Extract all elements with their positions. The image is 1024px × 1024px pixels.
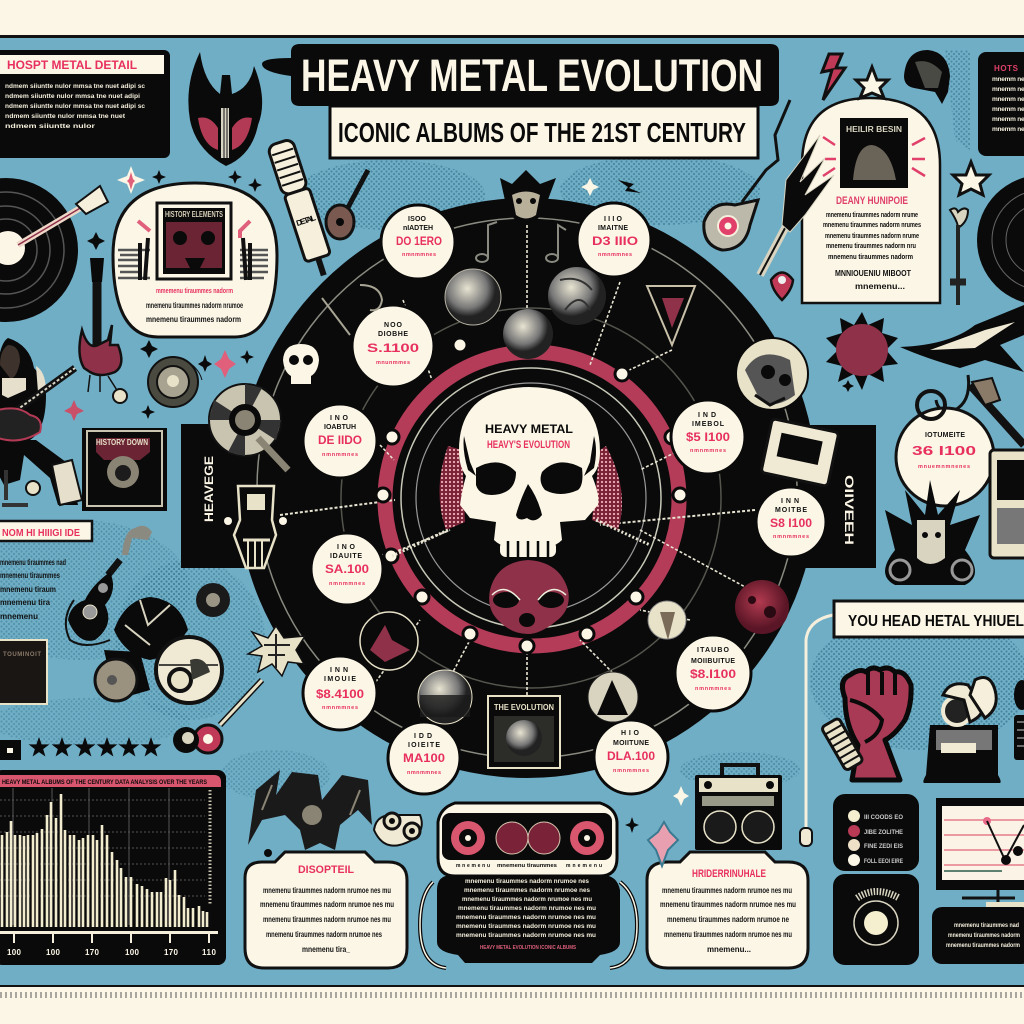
icon: spiked helmet top <box>500 170 556 225</box>
bubble 4: INO <box>330 415 349 422</box>
icon: vinyl record left <box>0 178 78 322</box>
icon: top right skull <box>904 50 950 104</box>
bubble 9: $8.I100 <box>690 667 736 681</box>
bubble 2 <box>577 203 651 277</box>
bubble 6: INN <box>781 498 799 505</box>
panel: arched album card right <box>802 98 940 303</box>
bubble 6 <box>756 487 826 557</box>
icon: album bottom <box>488 696 560 768</box>
panel: album card left: mmemenu tiraummes nadorm <box>156 288 233 295</box>
subtitle: ICONIC ALBUMS OF THE 21ST CENTURY <box>338 117 746 148</box>
panel: text box bottom right: mnemenu... <box>707 945 751 954</box>
ring nodes <box>376 338 687 653</box>
bubble 3: mnunmmes <box>376 360 410 366</box>
icon: spiky red ball <box>826 312 898 390</box>
icon: red moon left <box>360 612 418 670</box>
panel: top left notes: HOSPT METAL DETAIL <box>7 58 137 72</box>
panel: top left notes: ndmem siiuntte nulor mmsa tne nuet adipi sc <box>5 83 145 90</box>
icon: guitarist <box>0 338 82 505</box>
bubble 9: ITAUBO <box>697 647 730 654</box>
bubble 11 <box>594 720 668 794</box>
halftone ears of skull <box>392 446 650 556</box>
panel: left mid text: mnemenu tiraummes <box>0 571 60 580</box>
panel: top right notes: HOTS <box>994 64 1019 73</box>
panel: round tag right <box>896 391 994 506</box>
bubble 2: IMAITNE <box>598 225 628 232</box>
chart: waveform panel: 110 <box>202 948 217 957</box>
bubble 10: IDD <box>414 733 432 740</box>
icon: star rating <box>0 737 161 760</box>
bubble 8: IMOUIE <box>324 676 356 683</box>
panel: text box bottom right: mnemenu tiraummes nadorm nrumoe nes mu <box>664 930 792 939</box>
bubble 7: SA.100 <box>325 562 369 576</box>
panel: top left notes <box>0 50 170 158</box>
icon: cassette deck: mnemenu tiraummes <box>497 863 557 869</box>
bubble 4 <box>303 404 377 478</box>
title banner: HEAVY METAL EVOLUTION <box>301 50 763 101</box>
icon: cassette deck: mnemenu <box>566 863 602 869</box>
icon: vinyl right <box>977 175 1024 305</box>
chart: central disc <box>237 198 817 778</box>
bubble 2: IIIO <box>604 216 623 223</box>
photo balls <box>445 267 606 359</box>
panel: values heading <box>800 601 1024 846</box>
icon: right edge meter <box>1014 680 1024 760</box>
panel: text box bottom left: mnemenu tiraummes nadorm nrumoe nes mu <box>263 886 391 895</box>
icon: picks on disc <box>322 285 382 335</box>
icon: map pin <box>771 272 793 300</box>
chart: waveform panel: 170 <box>164 948 179 957</box>
panel: arched album card right: mnemenu tiraummes nadorm nrume <box>825 233 919 240</box>
bubble 4: nmnmmnes <box>322 452 358 458</box>
bubble 8 <box>303 656 377 730</box>
icon: central skull <box>459 387 600 558</box>
bubble 3: NOO <box>384 322 403 329</box>
decorative sparks <box>64 166 854 833</box>
panel: left side tab <box>181 424 271 568</box>
icon: drum cluster <box>95 597 222 703</box>
panel: right side tab <box>790 425 876 568</box>
icon: guitar on vinyl <box>18 186 108 245</box>
bubble 1: ISOO <box>408 216 427 223</box>
panel: top left notes: ndmem siiuntte nulor mmsa tne nuet <box>5 113 126 120</box>
icon: speaker disc <box>148 357 202 407</box>
icon: album black left <box>0 640 47 704</box>
icon: album bottom: THE EVOLUTION <box>494 703 554 712</box>
bubble 7 <box>311 533 383 605</box>
panel: left mid text <box>0 521 92 621</box>
panel: arched album card right: DEANY HUNIPOIE <box>836 195 908 207</box>
icon: small dial left <box>196 583 230 617</box>
icon: amp right edge <box>990 450 1024 558</box>
bubble 9 <box>675 635 751 711</box>
bubble 5: nmnmmnes <box>690 448 726 454</box>
bubble 6: S8 I100 <box>770 516 812 530</box>
panel: text box bottom right: mnemenu tiraummes nadorm nrumoe nes mu <box>660 900 796 909</box>
bubble 6: MOITBE <box>775 507 807 514</box>
panel: arched album card right: mnemenu tiraummes nadorm nrume <box>826 212 918 219</box>
icon: amp with headphones <box>923 678 1001 783</box>
bubble 6: nmnmmnes <box>773 534 809 540</box>
panel: top left notes: ndmem siiuntte nulor <box>5 123 96 130</box>
panel: legend: JIBE ZOLITHE <box>864 830 903 836</box>
icon: star top <box>856 67 888 98</box>
bubble 8: INN <box>330 667 348 674</box>
panel: text box bottom left: mnemenu tiraummes nadorm nrumoe nes mu <box>260 900 394 909</box>
panel: text box bottom right: mnemenu tiraummes nadorm nrumoe nes mu <box>662 886 792 895</box>
bubble 5: IND <box>698 412 716 419</box>
bubble 11: MOIITUNE <box>613 740 649 747</box>
chart: waveform panel: HEAVY METAL ALBUMS OF THE CENTURY DATA ANALYSIS OVER THE YEARS <box>2 780 207 786</box>
panel: album card left: HISTORY ELEMENTS <box>165 210 223 219</box>
panel: round tag right: mnuemnmnenes <box>918 464 970 470</box>
icon: microphone <box>267 138 336 280</box>
top cream border <box>0 0 1024 38</box>
decorative cables <box>420 882 637 968</box>
panel: text box bottom left: mnemenu tiraummes nadorm nrumoe nes mu <box>263 915 391 924</box>
bubble 1 <box>381 205 455 279</box>
panel: top right notes <box>978 52 1024 156</box>
icon: raised fist <box>842 668 911 780</box>
icon: bass guitar <box>79 258 127 403</box>
icon: moon photo <box>418 670 472 724</box>
panel: dial <box>833 874 919 965</box>
panel: top left notes: ndmem siiuntte nulor mmsa tne nuet adipi <box>5 93 140 100</box>
icon: cassette deck <box>438 803 617 876</box>
spokes <box>280 225 760 715</box>
icon: boombox <box>695 765 782 850</box>
icon: music notes <box>476 222 566 262</box>
icon: smoking guitar <box>66 526 152 645</box>
panel: text box bottom centre: mnemenu tiraummes nadorm nrumoe nes mu <box>456 923 596 930</box>
panel: text box bottom left <box>245 852 407 968</box>
panel: album card left <box>113 183 277 337</box>
panel: text box bottom left: DISOPTEIL <box>298 864 354 876</box>
halftone shading <box>0 50 1024 800</box>
bubble 2: nmnmmnes <box>598 252 632 258</box>
icon: pedal eye <box>704 100 790 250</box>
icon: pink diamond <box>648 822 678 866</box>
panel: arched album card right: mnemenu tiraummes nadorm <box>828 254 913 261</box>
icon: album black left: TOUMINOIT <box>3 652 41 658</box>
title banner <box>262 44 779 106</box>
icon: coiled cord <box>821 718 863 771</box>
panel: left mid text: mnemenu tiraummes nad <box>0 558 66 567</box>
panel: legend: FOLL EEOI EIRE <box>864 859 903 865</box>
bottom cream border <box>0 985 1024 1024</box>
icon: star right <box>953 162 989 195</box>
icon: pedal bottom left <box>173 680 262 753</box>
icon: triangle <box>647 286 695 345</box>
bubble 3: S.1100 <box>367 341 419 355</box>
chart: waveform panel: 170 <box>85 948 100 957</box>
icon: guitar head left <box>224 486 287 568</box>
panel: text box bottom right: HRIDERRINUHALE <box>692 868 766 880</box>
panel: arched album card right: mnemenu tiraummes nadorm nru <box>826 243 916 250</box>
panel: text box bottom centre: HEAVY METAL EVOLUTION ICONIC ALBUMS <box>480 945 577 951</box>
bubble 1: nIADTEH <box>403 225 433 232</box>
icon: starburst emblem <box>248 626 305 676</box>
icon: skull moon <box>736 338 808 410</box>
bubble 7: IDAUITE <box>330 553 362 560</box>
panel: left side tab: HEAVEGE <box>202 456 216 522</box>
chart: waveform panel <box>0 770 226 965</box>
panel: text box bottom left: mnemenu tiraummes nadorm nrumoe nes <box>266 930 382 939</box>
bubble 10: nmnmmnes <box>407 770 441 776</box>
icon: retro radio right <box>761 419 839 486</box>
icon: small skull left <box>283 344 319 384</box>
panel: round tag right: 36 I100 <box>912 443 976 458</box>
icon: pitchfork hand <box>760 135 834 275</box>
icon: figure ball <box>588 672 638 722</box>
bubble 3 <box>352 305 434 387</box>
panel: album card left: mnemenu tiraummes nadorm nrumoe <box>146 301 243 310</box>
icon: black album: HISTORY DOWN <box>96 438 148 447</box>
bubble 11: nmnmmnes <box>613 768 649 774</box>
bubble 7: nmnmmnes <box>329 581 365 587</box>
icon: mic stand right <box>950 208 968 305</box>
panel: arched album card right: HEILIR BESIN <box>846 125 902 134</box>
bubble 5: $5 I100 <box>686 430 730 444</box>
panel: text box bottom centre: mnemenu tiraummes nadorm nrumoe nes mu <box>458 905 596 912</box>
icon: pair of eyes <box>374 813 422 846</box>
panel: legend: FINE ZEDI EIS <box>864 844 903 850</box>
panel: arched album card right: MNNIOUENIU MIBOOT <box>835 269 911 278</box>
panel: left mid text: NOM HI HIIIGI IDE <box>2 528 80 539</box>
panel: text box bottom centre: mnemenu tiraummes nadorm nrumoe nes mu <box>462 896 592 903</box>
bubble 8: $8.4100 <box>316 687 364 701</box>
bubble 10: MA100 <box>403 751 445 765</box>
icon: dragon right <box>900 305 1024 412</box>
panel: arched album card right: mnemenu tiraummes nadorm nrumes <box>823 222 921 229</box>
panel: arched album card right: mnemenu... <box>855 282 905 291</box>
panel: text box bottom centre: mnemenu tiraummes nadorm nrumoe nes <box>465 878 589 885</box>
icon: bat gargoyle <box>248 770 372 857</box>
panel: top left notes: ndmem siiuntte nulor mmsa tne nuet adipi sc <box>5 103 145 110</box>
panel: text box bottom centre: mnemenu tiraummes nadorm nrumoe nes mu <box>456 932 596 939</box>
bubble 10 <box>388 722 460 794</box>
panel: text box bottom right: mnemenu tiraummes nadorm nrumoe ne <box>667 915 789 924</box>
panel: left mid text: mnemenu tiraum <box>0 585 56 594</box>
subtitle <box>330 106 758 158</box>
chart: waveform panel: 100 <box>46 948 61 957</box>
panel: right side tab: OIIVEEH <box>842 475 856 545</box>
bubble 1: nmnmmnes <box>402 252 436 258</box>
bubble 4: IOABTUH <box>324 424 356 431</box>
icon: spiked demon <box>885 480 980 585</box>
icon: black album <box>82 428 167 511</box>
panel: legend: III COODS EO <box>864 815 903 821</box>
chart grid <box>0 788 205 925</box>
icon: cassette deck: mnemenu <box>456 863 490 869</box>
bubble 1: DO 1ERO <box>396 234 442 248</box>
icon: cream ball <box>648 601 686 640</box>
icon: guitar neck right <box>970 378 1024 445</box>
panel: text box bottom right <box>647 852 808 968</box>
panel: legend <box>833 794 919 871</box>
panel: text box bottom centre: mnemenu tiraummes nadorm nrumoe nes <box>464 887 590 894</box>
icon: central skull: HEAVY'S EVOLUTION <box>487 439 570 451</box>
bubble 2: D3 IIIO <box>592 234 638 248</box>
bubble 11: DLA.100 <box>607 749 655 763</box>
bubble 5 <box>671 400 745 474</box>
icon: central skull: HEAVY METAL <box>485 422 573 436</box>
bubble 10: IOIEITE <box>408 742 440 749</box>
bubble 9: MOIIBUITUE <box>691 658 735 665</box>
panel: text box bottom left: mnemenu tira_ <box>302 945 350 954</box>
chart bars <box>2 794 207 927</box>
bubble 8: nmnmmnes <box>322 705 358 711</box>
icon: devil guitar top <box>188 52 262 166</box>
bubble 3: DIOBHE <box>378 331 408 338</box>
icon: lightning <box>822 54 845 100</box>
icon: dark red ball <box>735 580 789 634</box>
chart: waveform panel: 100 <box>125 948 140 957</box>
panel: text box bottom centre <box>437 875 620 963</box>
icon: demon face <box>489 560 569 634</box>
icon: vinyl small <box>209 384 288 470</box>
chart: waveform panel: 100 <box>7 948 22 957</box>
bubble 5: IMEBOL <box>692 421 725 428</box>
panel: round tag right: IOTUMEITE <box>925 432 965 439</box>
panel: left mid text: mnemenu tira <box>0 598 51 607</box>
album bubbles <box>303 203 826 794</box>
icon: small guitar <box>326 170 368 239</box>
panel: album card left: mnemenu tiraummes nadorm <box>146 315 241 324</box>
panel: text box bottom centre: mnemenu tiraummes nadorm nrumoe nes mu <box>456 914 596 921</box>
bubble 9: nmnmmnes <box>695 686 731 692</box>
bubble 11: HIO <box>621 730 640 737</box>
panel: left mid text: mnemenu <box>0 612 38 621</box>
icon: monitor chart <box>936 798 1024 908</box>
bubble 7: INO <box>337 544 356 551</box>
bubble 4: DE IIDO <box>318 433 362 447</box>
panel: text box right bottom <box>932 907 1024 964</box>
red ring <box>385 352 679 646</box>
icon: microphone: DETAIL <box>295 213 317 228</box>
